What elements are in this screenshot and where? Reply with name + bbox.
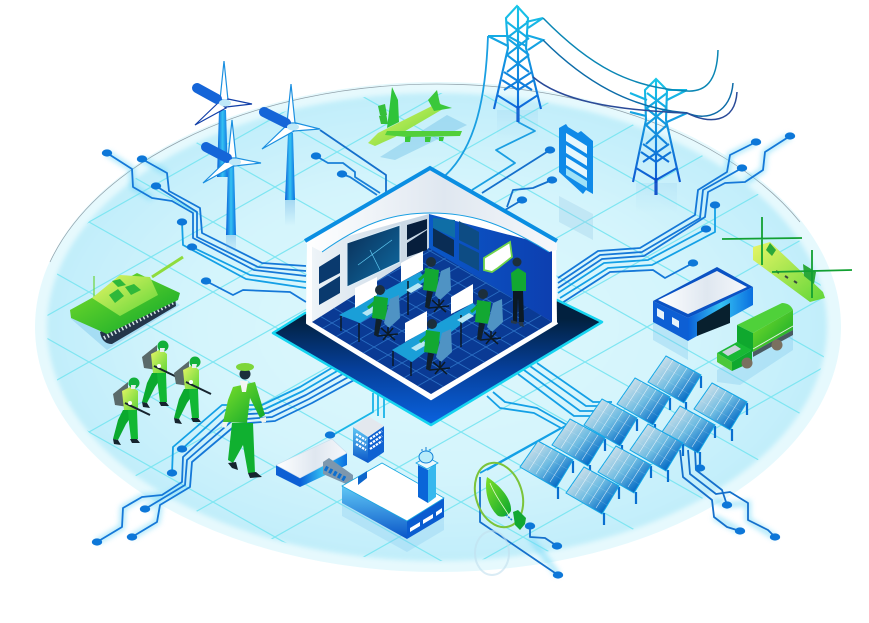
- bomber plane: [368, 87, 467, 160]
- traces: lower left bundle: [97, 363, 356, 542]
- front desks: [392, 284, 480, 376]
- wind turbine 3: [203, 120, 261, 255]
- officer: [222, 363, 266, 478]
- ground disc: [30, 70, 850, 580]
- tank: [70, 257, 183, 350]
- wind turbine 2: [262, 84, 320, 226]
- left wall screens: [319, 219, 427, 305]
- room base plate: [273, 300, 602, 425]
- helicopter: [722, 217, 852, 302]
- room front edge: [307, 322, 557, 398]
- room walls: [306, 168, 557, 400]
- power pylon left: [488, 6, 543, 122]
- connector nodes: [92, 132, 795, 579]
- power pylon right: [630, 79, 687, 195]
- soldier middle: [142, 340, 179, 408]
- main factory: [342, 463, 444, 552]
- power lines: [533, 18, 737, 120]
- speech bubble: [484, 242, 512, 272]
- solar array: [520, 356, 747, 525]
- battery: [559, 124, 593, 240]
- control room: [273, 168, 602, 425]
- trace glow outside the disc: [97, 136, 790, 575]
- pylon reflections: [497, 110, 677, 213]
- operators front: [420, 319, 452, 374]
- room floor: [312, 248, 552, 394]
- control tower: [416, 447, 438, 503]
- right wall screens: [433, 218, 479, 271]
- soldiers: [113, 340, 211, 445]
- connector: [323, 458, 353, 487]
- warehouse: [653, 267, 753, 360]
- truck: [717, 303, 793, 385]
- roof: [305, 168, 557, 252]
- operators rear: [368, 285, 400, 340]
- traces: upper right bundle: [558, 136, 790, 303]
- factory complex: [276, 416, 444, 552]
- traces: leaf: [480, 477, 558, 575]
- circuit traces: [97, 36, 790, 575]
- rear desks: [339, 251, 427, 342]
- traces: top to room: [316, 36, 552, 210]
- traces: upper left bundle: [107, 153, 306, 302]
- office block: [353, 416, 384, 463]
- wind turbine 1: [195, 61, 252, 177]
- presenter: [511, 258, 526, 327]
- traces: lower right bundle: [480, 363, 775, 537]
- traces: bottom centre: [333, 393, 384, 435]
- soldier right: [174, 356, 211, 424]
- hangar: [276, 439, 347, 487]
- soldier left: [113, 378, 150, 445]
- green energy leaf and plug: [467, 457, 531, 575]
